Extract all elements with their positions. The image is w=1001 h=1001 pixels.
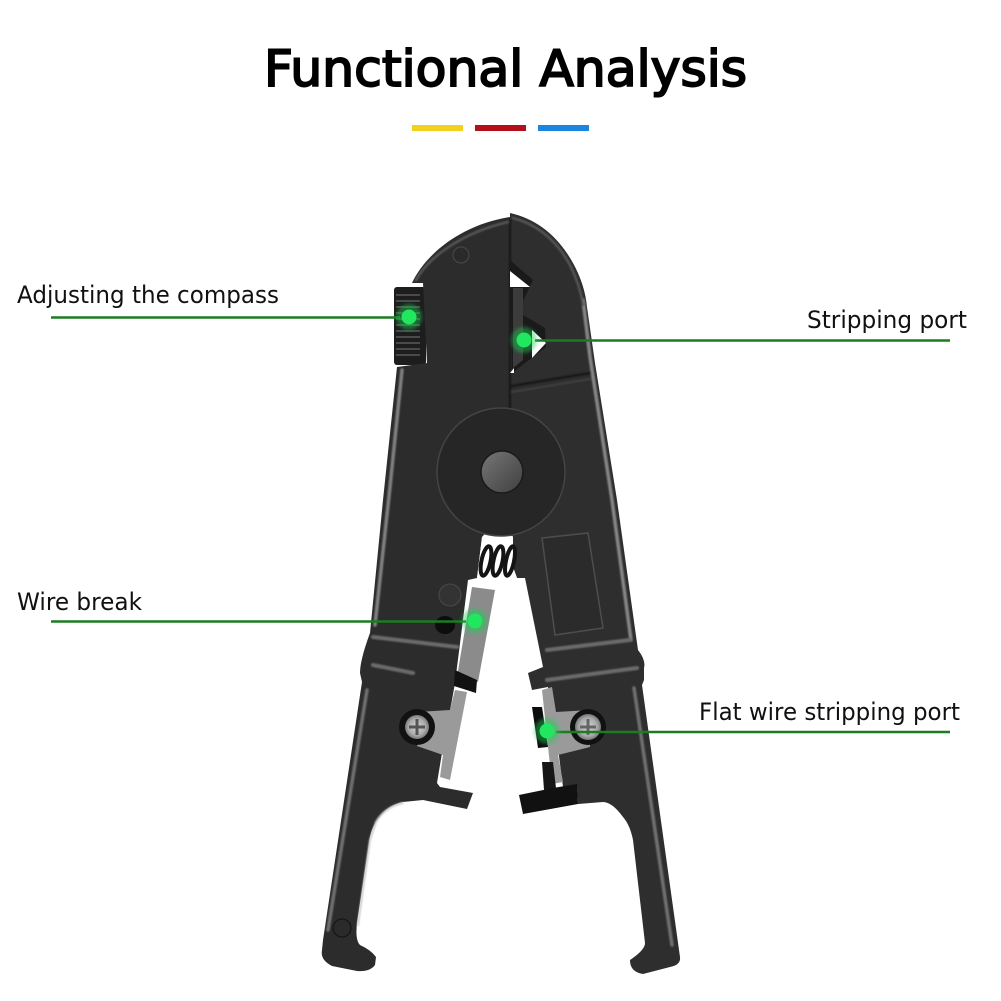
callout: stripping port: Stripping port [807, 306, 967, 334]
callout: adjusting the compass: Adjusting the compass [17, 281, 279, 309]
spring [478, 545, 517, 577]
callout: flat wire stripping port: Flat wire stripping port [699, 698, 960, 726]
wire break blade [417, 587, 495, 780]
pivot hub [437, 408, 565, 536]
callout: adjusting the compass [17, 281, 422, 330]
screws [399, 709, 606, 745]
callout: stripping port [511, 306, 967, 353]
moulded holes and window [333, 247, 603, 937]
wire stripper tool [322, 213, 680, 974]
handle rim highlights [328, 218, 672, 945]
callout: wire break [17, 588, 488, 634]
left handle [322, 217, 515, 971]
title: Functional Analysis [264, 40, 747, 98]
gap under hub [477, 537, 517, 578]
callout: flat wire stripping port [534, 698, 960, 744]
title colour bars [412, 125, 589, 131]
callout: wire break: Wire break [17, 588, 142, 616]
stripping port opening [510, 260, 546, 373]
right handle [495, 213, 680, 974]
flat wire stripping port [519, 687, 590, 814]
adjusting knob [394, 287, 426, 365]
